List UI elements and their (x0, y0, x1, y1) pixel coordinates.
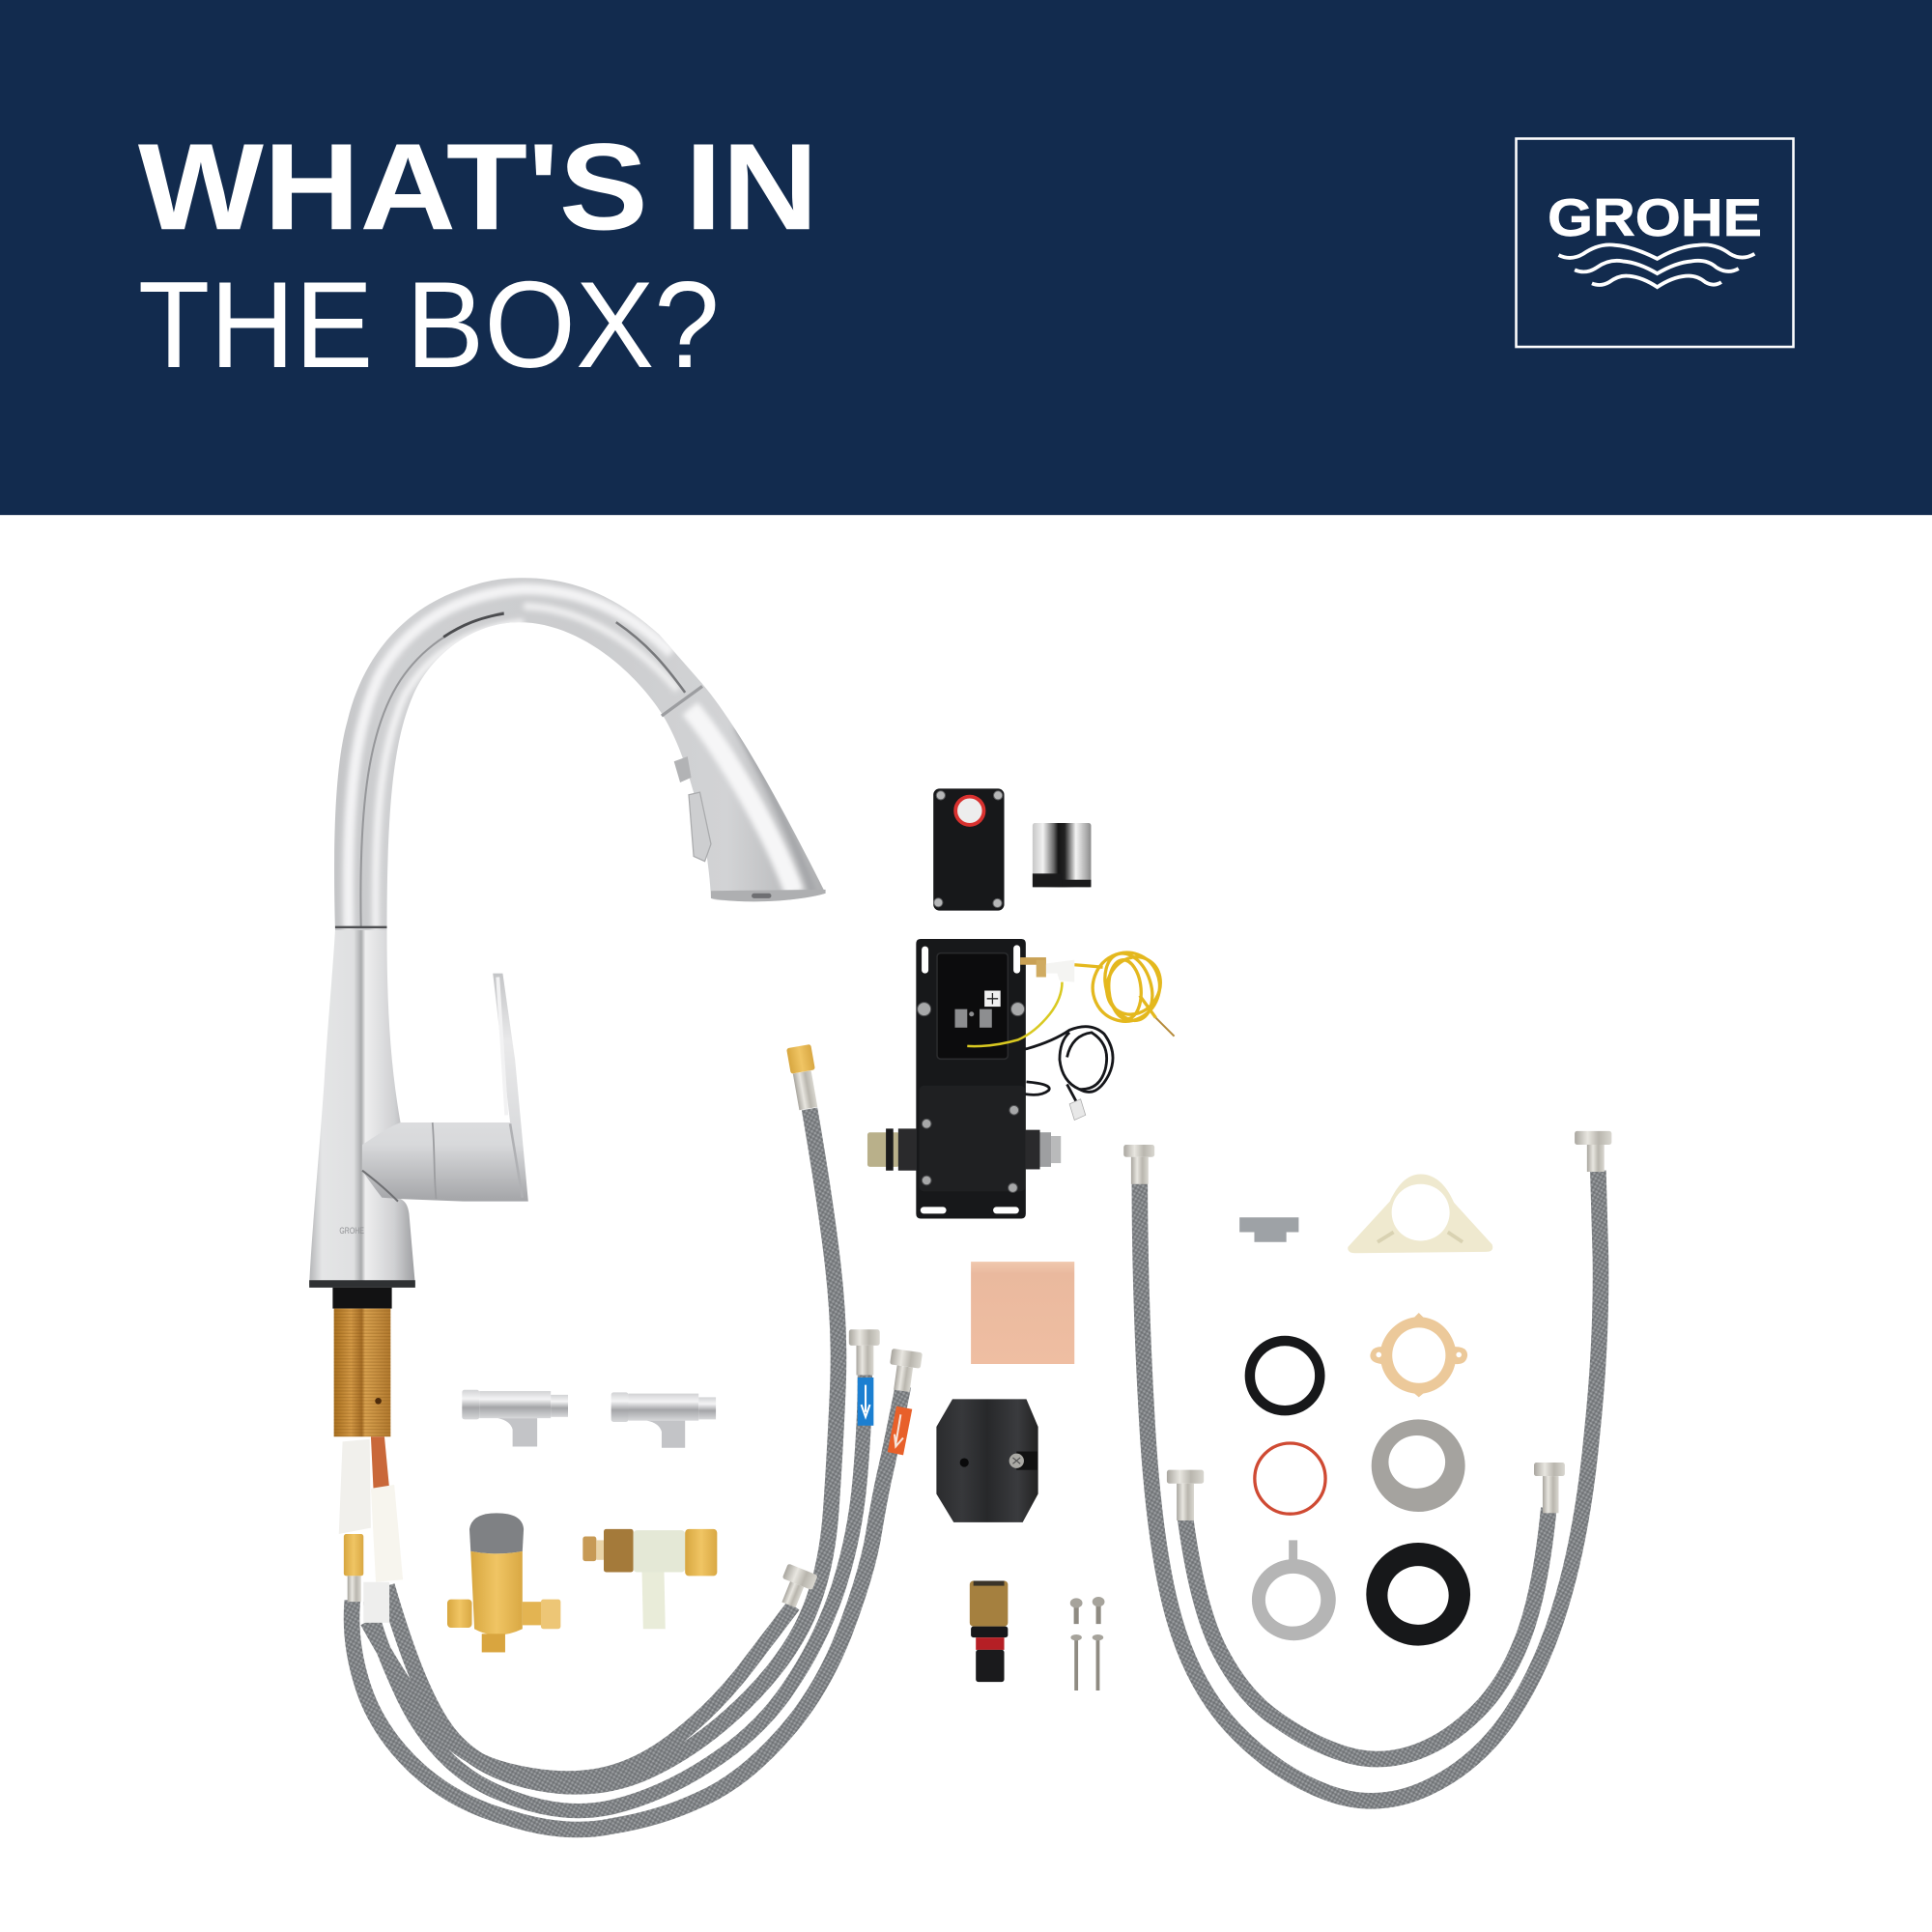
faucet (309, 578, 826, 1623)
brass mixing valve (447, 1513, 560, 1652)
yellow earth wire coil (1074, 943, 1175, 1037)
gooseneck and spray head (334, 578, 826, 930)
hose fitting: brass end (786, 1044, 817, 1110)
sensor cover (933, 788, 1005, 911)
hose fitting: blue-labelled hot/cold hose (849, 1329, 880, 1426)
mounting slots (921, 945, 1020, 1213)
lever handle (362, 974, 528, 1202)
black barrel clamp (936, 1399, 1038, 1522)
header band (0, 0, 1932, 515)
faucet engraved logo: GROHE (339, 1226, 364, 1236)
large black gasket (1366, 1543, 1470, 1646)
battery contacts (955, 1009, 992, 1028)
tee valve with hose barb (582, 1529, 717, 1629)
hose nuts: right pair (1123, 1131, 1611, 1520)
title: WHAT'S IN (138, 119, 818, 256)
chrome T fitting left (462, 1390, 568, 1446)
control unit screws (918, 1003, 1025, 1192)
right pair of hoses (1140, 1171, 1601, 1801)
lower cover (920, 1086, 1025, 1191)
green-yellow wire (967, 982, 1062, 1046)
faucet collar line (335, 926, 387, 928)
mounting screws (1070, 1597, 1104, 1690)
left water connector (867, 1128, 917, 1171)
cover screws (934, 791, 1003, 908)
brass quick-connect cartridge (970, 1580, 1008, 1682)
polarity label (984, 991, 1001, 1007)
logo: GROHE: GROHE (1548, 187, 1762, 247)
control unit (867, 939, 1175, 1218)
faucet body (309, 930, 415, 1285)
wire connector (1069, 1099, 1086, 1120)
title: THE BOX? (138, 257, 720, 394)
black washer small (1250, 1341, 1320, 1410)
copper tube (371, 1436, 389, 1489)
hose fitting: orange-labelled hose (887, 1349, 923, 1455)
logo: GROHE (1517, 138, 1794, 347)
black sensor cable (960, 1027, 1113, 1103)
black base gasket (309, 1280, 415, 1309)
grey plastic clip (1239, 1217, 1298, 1242)
grey metal washer (1372, 1419, 1465, 1512)
battery (1033, 823, 1091, 887)
copper foil sheet (971, 1262, 1074, 1364)
chrome T fitting right (611, 1392, 716, 1448)
handle shading (362, 977, 523, 1202)
thin washer with tab (1252, 1540, 1336, 1640)
tan gasket (1370, 1313, 1467, 1397)
back plate (916, 939, 1026, 1218)
red o-ring (1255, 1443, 1325, 1514)
faucet hoses (352, 1109, 903, 1830)
battery recess (937, 953, 1008, 1059)
white sleeves and connector (339, 1439, 403, 1623)
cream mounting bracket (1348, 1175, 1492, 1253)
hose fitting: short hose nut (774, 1563, 818, 1611)
earth connector (1020, 957, 1074, 982)
threaded shank (334, 1309, 390, 1436)
right water connector (1025, 1130, 1061, 1169)
sensor window (955, 797, 983, 825)
title (138, 119, 818, 394)
